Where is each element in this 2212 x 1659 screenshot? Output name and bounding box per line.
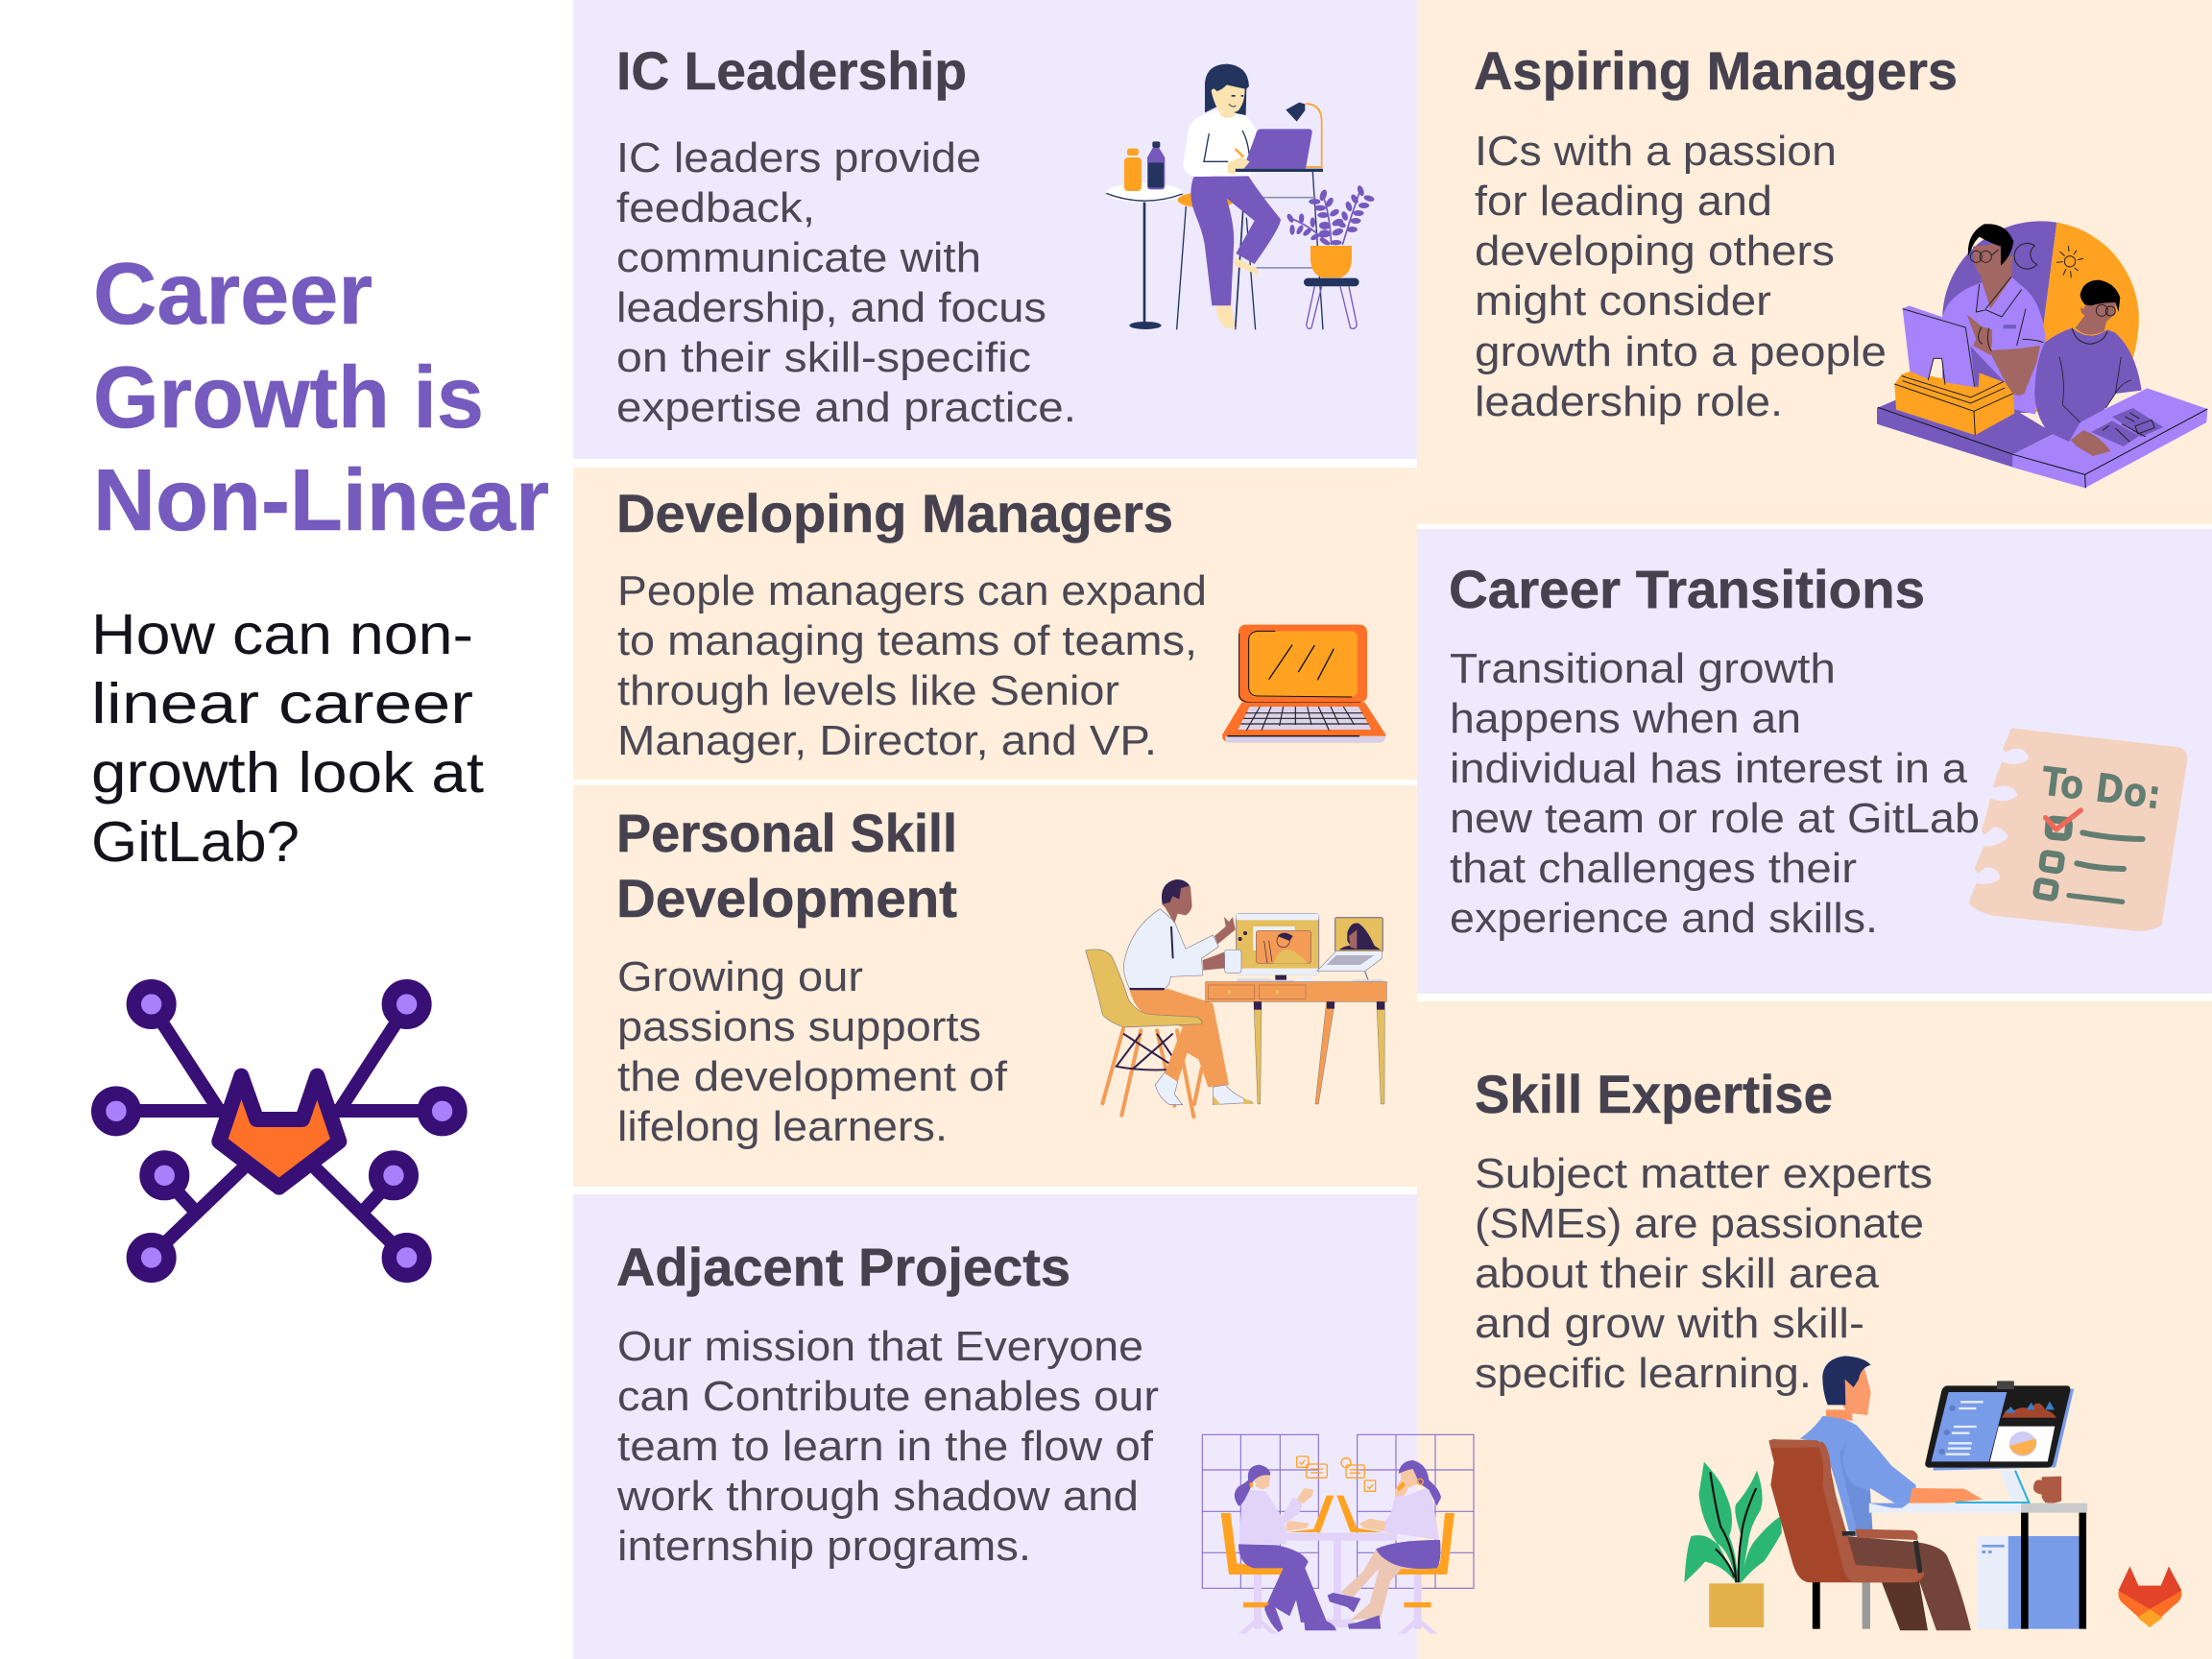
panel: personal skill development [573, 785, 1417, 1187]
panel: career transitions [1417, 529, 2212, 994]
body text: lifelong learners. [617, 1103, 948, 1150]
illustration: two women collaborating at table [1202, 1434, 1474, 1634]
body text: Subject matter experts [1475, 1150, 1933, 1197]
body text: and grow with skill- [1475, 1300, 1864, 1347]
title: Non-Linear [93, 452, 549, 549]
body text: on their skill-specific [616, 334, 1031, 381]
body text [1450, 645, 1980, 942]
icon: to-do note: To Do: [2039, 758, 2164, 818]
illustration: woman on stool with laptop [1106, 64, 1375, 329]
body text: leadership, and focus [616, 284, 1046, 331]
heading: Development [616, 868, 957, 928]
body text: developing others [1475, 228, 1835, 275]
title: Career [93, 246, 373, 343]
body text: team to learn in the flow of [617, 1423, 1154, 1470]
body text: Growing our [617, 953, 863, 1000]
body text: new team or role at GitLab [1450, 795, 1980, 842]
subtitle [91, 603, 484, 874]
title: Growth is [93, 349, 484, 446]
heading: Skill Expertise [1475, 1064, 1833, 1124]
icon: GitLab logo [2118, 1567, 2181, 1627]
body text: Transitional growth [1450, 645, 1836, 692]
illustration: person working at computer with plant [1684, 1356, 2181, 1630]
subtitle: growth look at [91, 741, 484, 805]
body text: passions supports [617, 1003, 981, 1050]
body text [617, 953, 1008, 1150]
heading: IC Leadership [616, 40, 967, 101]
body text: ICs with a passion [1475, 128, 1837, 175]
icon: laptop [1222, 625, 1385, 742]
body text: to managing teams of teams, [617, 617, 1197, 664]
body text [616, 1323, 1159, 1570]
subtitle: GitLab? [91, 810, 300, 874]
heading [616, 803, 957, 928]
panel: aspiring managers [1417, 0, 2212, 524]
heading: Personal Skill [616, 803, 957, 863]
body text: that challenges their [1450, 845, 1857, 892]
body text: communicate with [616, 234, 981, 281]
subtitle: How can non- [91, 603, 473, 666]
heading: Developing Managers [616, 483, 1173, 543]
body text: experience and skills. [1450, 895, 1878, 942]
body text: about their skill area [1475, 1250, 1880, 1297]
body text: work through shadow and [616, 1473, 1139, 1520]
panel: IC leadership [573, 0, 1417, 459]
body text: might consider [1475, 277, 1771, 325]
body text: People managers can expand [617, 567, 1207, 614]
panel: intro column [91, 246, 549, 1275]
body text: can Contribute enables our [617, 1373, 1159, 1420]
body text: happens when an [1450, 695, 1801, 742]
body text [1475, 128, 1887, 425]
body text: individual has interest in a [1450, 745, 1968, 792]
body text: for leading and [1475, 178, 1772, 225]
illustration: man on video call at desk [1086, 879, 1386, 1117]
icon: network of nodes around fox head [99, 987, 460, 1275]
panel: developing managers [573, 468, 1417, 780]
body text [617, 567, 1207, 764]
heading: Career Transitions [1449, 559, 1925, 619]
body text: (SMEs) are passionate [1475, 1200, 1924, 1247]
body text [1475, 1150, 1933, 1397]
subtitle: linear career [91, 672, 473, 735]
body text: expertise and practice. [616, 384, 1076, 431]
body text [616, 134, 1076, 431]
body text: Our mission that Everyone [617, 1323, 1143, 1370]
title [93, 246, 549, 549]
body text: through levels like Senior [617, 667, 1119, 714]
illustration: two colleagues at desk [1877, 221, 2207, 488]
body text: specific learning. [1475, 1350, 1812, 1397]
panel: adjacent projects [573, 1194, 1474, 1659]
body text: Manager, Director, and VP. [617, 717, 1157, 764]
body text: feedback, [616, 184, 815, 231]
panel: skill expertise [1417, 1001, 2212, 1659]
body text: IC leaders provide [616, 134, 981, 181]
body text: the development of [617, 1053, 1008, 1100]
body text: internship programs. [617, 1523, 1031, 1570]
icon: to-do note [1969, 728, 2187, 931]
body text: growth into a people [1475, 328, 1887, 375]
heading: Adjacent Projects [616, 1237, 1070, 1297]
body text: leadership role. [1475, 378, 1783, 425]
heading: Aspiring Managers [1474, 40, 1958, 101]
